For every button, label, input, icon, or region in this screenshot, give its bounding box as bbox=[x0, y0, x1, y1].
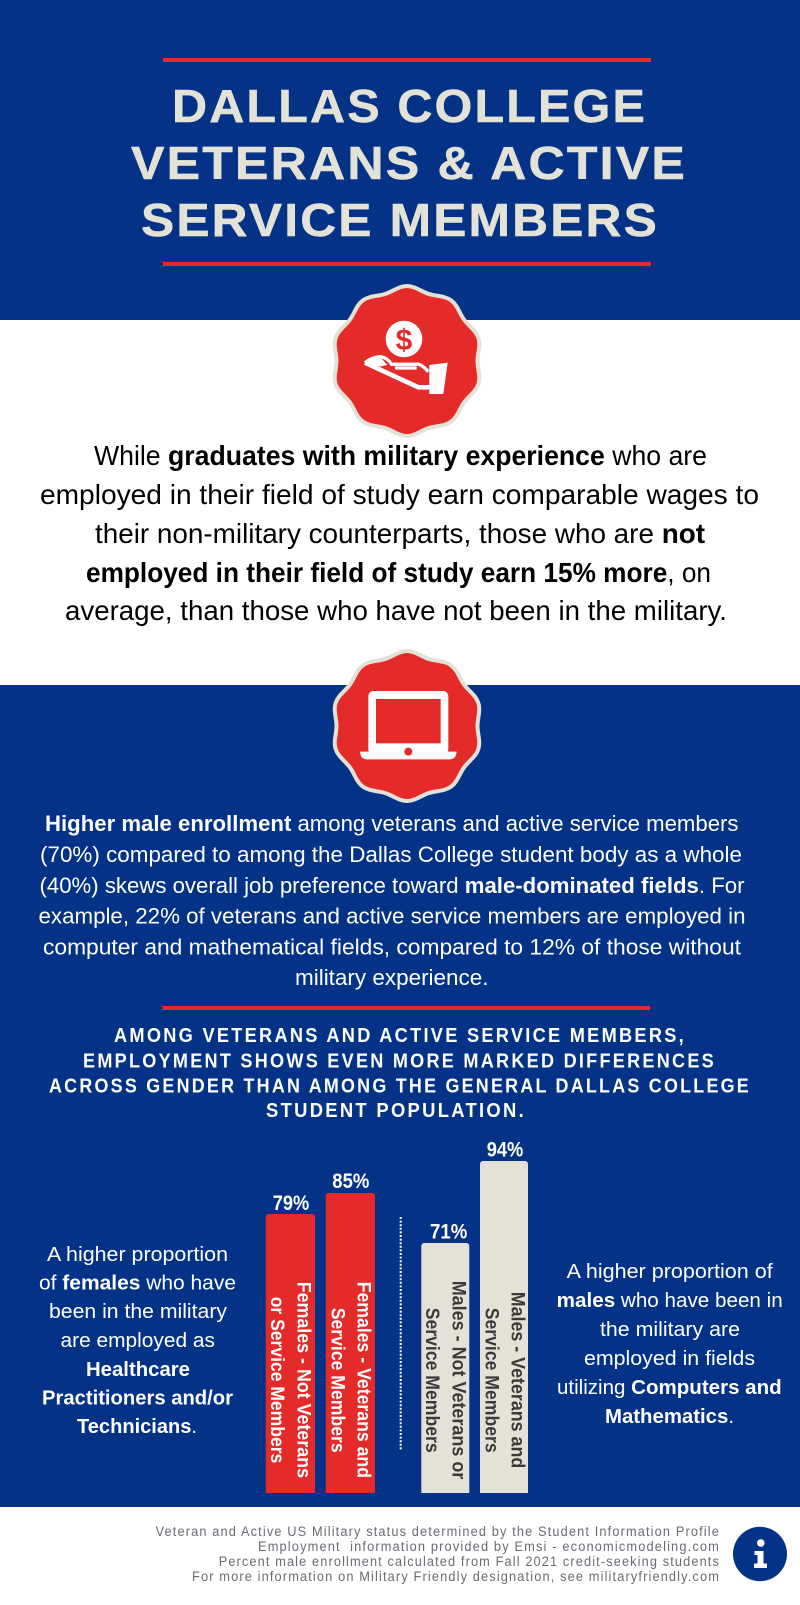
heading: gender differences: EMPLOYMENT SHOWS EVEN MORE MARKED DIFFERENCES bbox=[83, 1050, 716, 1072]
icon: info circle bbox=[733, 1527, 787, 1581]
text block: wages paragraph: their non-military counterparts, those who are not bbox=[95, 518, 705, 549]
text block: enrollment paragraph: (40%) skews overall job preference toward male-dominated fields. For bbox=[40, 873, 745, 898]
bar: males not veterans 71%: Service Members bbox=[421, 1308, 443, 1453]
text block: footer sources bbox=[156, 1524, 720, 1584]
text block: females callout: are employed as bbox=[60, 1329, 215, 1352]
title: SERVICE MEMBERS bbox=[141, 194, 659, 246]
text block: enrollment paragraph: (70%) compared to among the Dallas College student body as a whole bbox=[40, 842, 742, 867]
text block: females callout: Technicians. bbox=[77, 1415, 197, 1438]
bar: males veterans 94% bbox=[480, 1139, 529, 1493]
text block: males callout: Mathematics. bbox=[605, 1405, 734, 1428]
text block: enrollment paragraph: computer and mathematical fields, compared to 12% of those without bbox=[43, 934, 742, 960]
text block: footer sources: Percent male enrollment calculated from Fall 2021 credit-seeking students bbox=[219, 1554, 720, 1569]
text block: females callout: been in the military bbox=[49, 1300, 228, 1323]
icon: hand holding coin badge: $ bbox=[396, 324, 413, 357]
bar: males veterans 94%: Males - Veterans and bbox=[507, 1292, 529, 1468]
text block: wages paragraph: While graduates with military experience who are bbox=[94, 440, 707, 471]
bar: males not veterans 71% bbox=[421, 1221, 469, 1493]
bar: females veterans 85%: 85% bbox=[332, 1170, 370, 1193]
bar: females not veterans 79%: Females - Not Veterans bbox=[292, 1282, 314, 1478]
text block: wages paragraph: average, than those who have not been in the military. bbox=[65, 595, 727, 626]
text block: enrollment paragraph: Higher male enrollment among veterans and active service members bbox=[45, 811, 738, 836]
text block: males callout: A higher proportion of bbox=[567, 1260, 773, 1283]
text block: females callout: Healthcare bbox=[86, 1358, 190, 1381]
bar: females veterans 85%: Females - Veterans and bbox=[352, 1282, 374, 1478]
text block: wages paragraph: employed in their field of study earn comparable wages to bbox=[40, 479, 759, 510]
text block: enrollment paragraph: military experience. bbox=[295, 965, 488, 990]
text block: males callout: the military are bbox=[600, 1318, 740, 1341]
title bbox=[131, 80, 687, 246]
text block: females callout: Practitioners and/or bbox=[42, 1386, 233, 1410]
title: VETERANS & ACTIVE bbox=[131, 137, 687, 189]
bar: males not veterans 71%: 71% bbox=[430, 1221, 468, 1244]
text block: wages paragraph: employed in their field of study earn 15% more, on bbox=[86, 557, 711, 588]
text block: wages paragraph bbox=[40, 440, 759, 626]
text block: males callout bbox=[557, 1260, 783, 1428]
icon: hand holding coin badge bbox=[335, 286, 479, 436]
text block: enrollment paragraph bbox=[38, 811, 746, 990]
heading: gender differences: AMONG VETERANS AND ACTIVE SERVICE MEMBERS, bbox=[114, 1025, 686, 1047]
bar: females not veterans 79%: or Service Members bbox=[266, 1297, 288, 1463]
text block: enrollment paragraph: example, 22% of veterans and active service members are employed in bbox=[38, 904, 746, 928]
text block: males callout: males who have been in bbox=[557, 1289, 783, 1312]
text block: footer sources: Veteran and Active US Military status determined by the Student Information Profile bbox=[156, 1524, 720, 1539]
panel: header bbox=[0, 0, 800, 320]
text block: footer sources: For more information on Military Friendly designation, see militaryfriendly.com bbox=[192, 1569, 720, 1584]
heading: gender differences: STUDENT POPULATION. bbox=[266, 1100, 526, 1122]
text block: footer sources: Employment information provided by Emsi - economicmodeling.com bbox=[258, 1539, 720, 1554]
icon: laptop badge bbox=[335, 651, 479, 801]
bar: females not veterans 79%: 79% bbox=[273, 1192, 309, 1215]
text block: males callout: utilizing Computers and bbox=[557, 1376, 782, 1399]
text block: females callout bbox=[39, 1243, 236, 1438]
bar: males not veterans 71%: Males - Not Veterans or bbox=[447, 1281, 469, 1480]
text block: females callout: of females who have bbox=[39, 1272, 236, 1294]
bar: males veterans 94%: 94% bbox=[487, 1139, 524, 1162]
text block: females callout: A higher proportion bbox=[47, 1243, 228, 1266]
bar: females veterans 85% bbox=[326, 1170, 375, 1493]
text block: males callout: employed in fields bbox=[584, 1347, 755, 1370]
bar: females not veterans 79% bbox=[266, 1192, 315, 1493]
bar: males veterans 94%: Service Members bbox=[481, 1308, 503, 1453]
panel: lower blue section bbox=[0, 685, 800, 1507]
title: DALLAS COLLEGE bbox=[172, 80, 647, 132]
bar: females veterans 85%: Service Members bbox=[327, 1308, 349, 1453]
heading: gender differences bbox=[49, 1025, 751, 1122]
bar chart: employment by gender and military status bbox=[266, 1139, 529, 1493]
